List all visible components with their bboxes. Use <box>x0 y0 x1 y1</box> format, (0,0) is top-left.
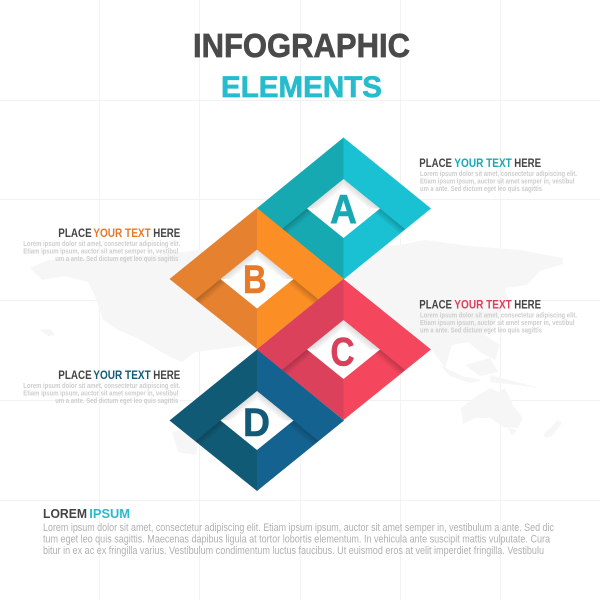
diamond B <box>170 208 344 349</box>
text block B: Etiam ipsum ipsum, auctor sit amet semper in, vestibul <box>23 248 178 256</box>
text block C: YOUR TEXT <box>454 298 512 312</box>
text block A: HERE <box>514 156 541 170</box>
text block B: HERE <box>153 226 180 240</box>
text block B: um a ante. Sed dictum eget leo quis sagittis <box>55 256 178 263</box>
footer text block: IPSUM <box>89 506 130 521</box>
text block C: Etiam ipsum ipsum, auctor sit amet semper in, vestibul <box>420 320 575 327</box>
footer text block <box>43 506 554 557</box>
title <box>193 28 410 104</box>
title: ELEMENTS <box>221 71 382 104</box>
text block A: Etiam ipsum ipsum, auctor sit amet semper in, vestibul <box>420 178 575 186</box>
text block B: PLACE <box>58 226 92 240</box>
text block D: HERE <box>153 368 180 382</box>
footer text block: LOREM <box>43 506 87 521</box>
text block C: um a ante. Sed dictum eget leo quis sagittis <box>420 328 542 334</box>
world map <box>30 240 563 455</box>
text block C: PLACE <box>419 298 452 312</box>
text block D: Etiam ipsum ipsum, auctor sit amet semper in, vestibul <box>23 390 178 398</box>
text block D: um a ante. Sed dictum eget leo quis sagittis <box>55 398 178 405</box>
text block A: PLACE <box>419 156 452 170</box>
text block D: PLACE <box>58 368 92 382</box>
text block D: Lorem ipsum dolor sit amet, consectetur adipiscing elit. <box>23 383 180 390</box>
diamond A: A <box>330 186 357 232</box>
text block D <box>23 368 180 405</box>
diamond B: B <box>243 258 266 302</box>
diamond A <box>256 138 431 280</box>
diamond C <box>256 279 431 420</box>
text block A: YOUR TEXT <box>454 156 512 170</box>
text block B: YOUR TEXT <box>93 226 151 240</box>
text block B: Lorem ipsum dolor sit amet, consectetur adipiscing elit. <box>23 241 180 248</box>
diamond D: D <box>243 401 270 445</box>
text block A: um a ante. Sed dictum eget leo quis sagittis <box>420 186 542 193</box>
text block C: HERE <box>514 298 541 312</box>
title: INFOGRAPHIC <box>193 28 410 65</box>
text block D: YOUR TEXT <box>93 368 151 382</box>
text block B <box>23 226 180 263</box>
text block C <box>419 298 577 334</box>
text block A <box>419 156 577 193</box>
diamond C: C <box>330 330 354 374</box>
diamond D <box>170 350 344 491</box>
